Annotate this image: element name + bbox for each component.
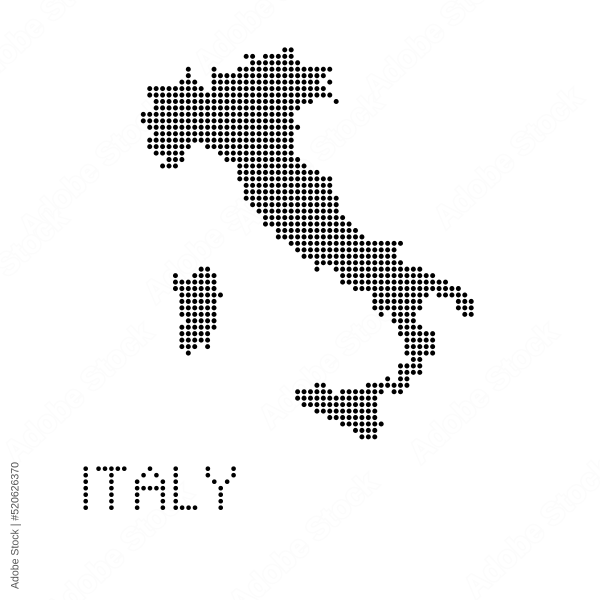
watermark stamps: Adobe Stock <box>227 84 390 240</box>
mainland and Sicily dots <box>143 50 471 437</box>
watermark stamps: Adobe Stock <box>402 314 565 470</box>
vertical watermark credit: Adobe Stock | #520626370 <box>10 462 22 589</box>
title: ITALY in dotted letters: ITALY <box>84 464 236 520</box>
watermark stamps: Adobe Stock <box>12 89 175 245</box>
watermark stamps: Adobe Stock <box>0 314 160 470</box>
Sardinia dots <box>175 269 221 353</box>
watermark stamps: Adobe Stock <box>137 154 300 310</box>
dotted map of Italy <box>143 50 471 437</box>
watermark stamps: Adobe Stock <box>252 279 415 435</box>
watermark stamps: Adobe Stock <box>427 79 590 235</box>
